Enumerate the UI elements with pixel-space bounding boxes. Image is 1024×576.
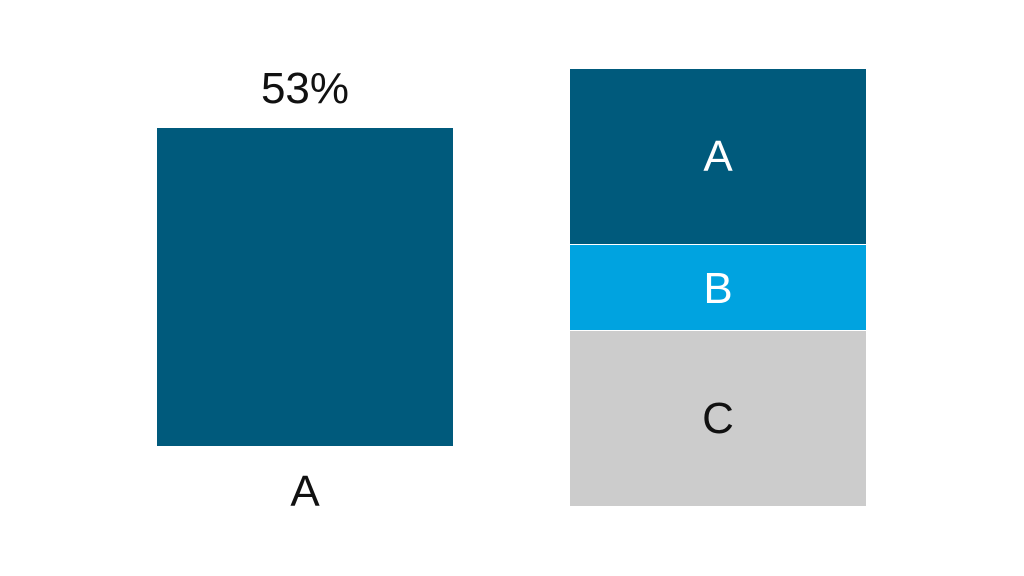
stacked bar — [570, 69, 866, 506]
segment C — [570, 331, 866, 506]
label: A under bar: A — [290, 467, 320, 516]
segment B — [570, 245, 866, 330]
bar: A single — [157, 128, 453, 446]
label: 53%: 53% — [261, 64, 349, 113]
segment A: A — [703, 132, 733, 181]
segment C: C — [702, 394, 734, 443]
segment A — [570, 69, 866, 244]
segment B: B — [703, 264, 733, 313]
